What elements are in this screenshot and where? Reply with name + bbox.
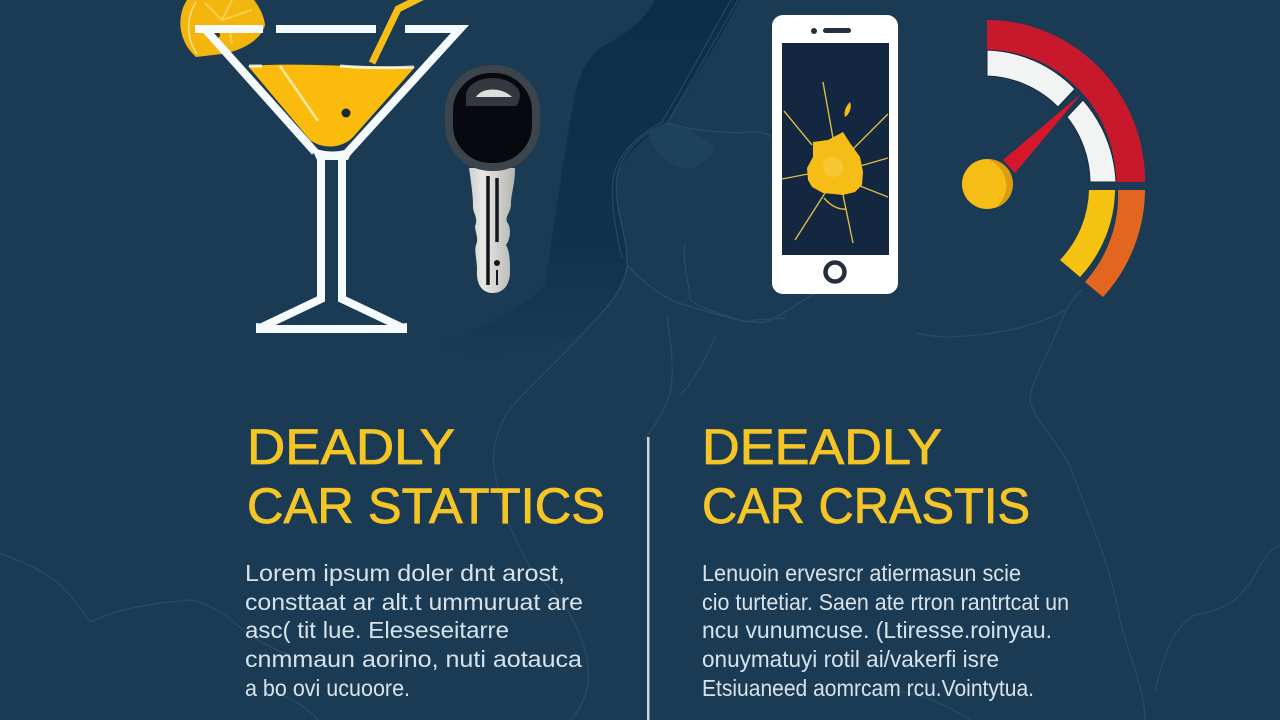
left body text: cnmmaun aorino, nuti aotauca	[245, 646, 582, 672]
icon: speedometer	[962, 20, 1145, 297]
impact splat	[807, 132, 863, 195]
right heading: CAR CRASTIS	[702, 478, 1030, 534]
left body text: Lorem ipsum doler dnt arost,	[245, 560, 565, 586]
icon: cracked phone	[772, 15, 898, 294]
right heading	[702, 419, 1030, 534]
left heading: CAR STATTICS	[247, 478, 605, 534]
right heading: DEEADLY	[702, 419, 942, 475]
lemon slice	[180, 0, 265, 57]
divider	[647, 437, 650, 720]
left body text: asc( tit lue. Eleseseitarre	[245, 617, 509, 643]
right body text: ncu vunumcuse. (Ltiresse.roinyau.	[702, 617, 1052, 643]
icon: car key	[449, 69, 536, 293]
left body text: a bo ovi ucuoore.	[245, 675, 410, 701]
right body text	[702, 560, 1069, 701]
left heading: DEADLY	[247, 419, 455, 475]
right body text: Lenuoin ervesrcr atiermasun scie	[702, 560, 1021, 586]
right body text: onuymatuyi rotil ai/vakerfi isre	[702, 646, 999, 672]
needle	[1003, 94, 1081, 173]
orange band	[1085, 190, 1145, 297]
white band	[987, 50, 1116, 182]
glass bowl base	[311, 147, 354, 160]
icon: cocktail glass	[180, 0, 460, 333]
red band	[987, 20, 1145, 182]
right body text: cio turtetiar. Saen ate rtron rantrtcat un	[702, 589, 1069, 615]
glass foot bar	[256, 323, 407, 333]
cocktail liquid	[248, 65, 415, 147]
crack lines	[782, 82, 888, 243]
yellow band	[1060, 190, 1115, 277]
needle hub	[962, 159, 1012, 209]
left body text	[245, 560, 583, 701]
glass outline	[195, 29, 460, 327]
right body text: Etsiuaneed aomrcam rcu.Vointytua.	[702, 675, 1034, 701]
left heading	[247, 419, 605, 534]
straw	[372, 0, 422, 63]
left body text: consttaat ar alt.t ummuruat are	[245, 589, 583, 615]
